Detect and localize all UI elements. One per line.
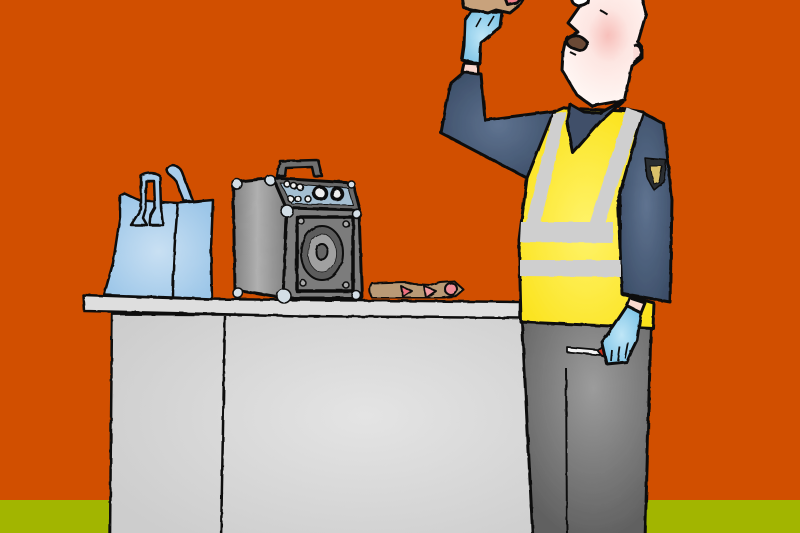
right sleeve — [620, 108, 672, 302]
moustache — [566, 36, 587, 51]
pants — [522, 322, 651, 533]
shoulder patch — [645, 158, 666, 190]
eye — [571, 0, 589, 6]
raised arm sleeve — [441, 72, 556, 178]
vest — [519, 108, 654, 328]
food rolls on table — [370, 281, 464, 298]
lower wrist — [627, 298, 645, 313]
eyebrow and mouth lines — [570, 10, 608, 55]
raised glove — [462, 11, 502, 64]
icon: blue tote bag — [104, 166, 213, 299]
ear — [633, 46, 642, 63]
wrist — [462, 63, 478, 74]
lower glove — [602, 306, 641, 364]
officer — [441, 0, 672, 533]
head — [562, 0, 646, 106]
knife — [567, 347, 601, 355]
held food — [462, 0, 526, 13]
vest reflective stripes — [520, 108, 642, 277]
ground strip — [0, 500, 800, 533]
collar — [567, 100, 624, 153]
table — [83, 295, 535, 533]
icon: portable speaker amplifier — [232, 160, 362, 303]
